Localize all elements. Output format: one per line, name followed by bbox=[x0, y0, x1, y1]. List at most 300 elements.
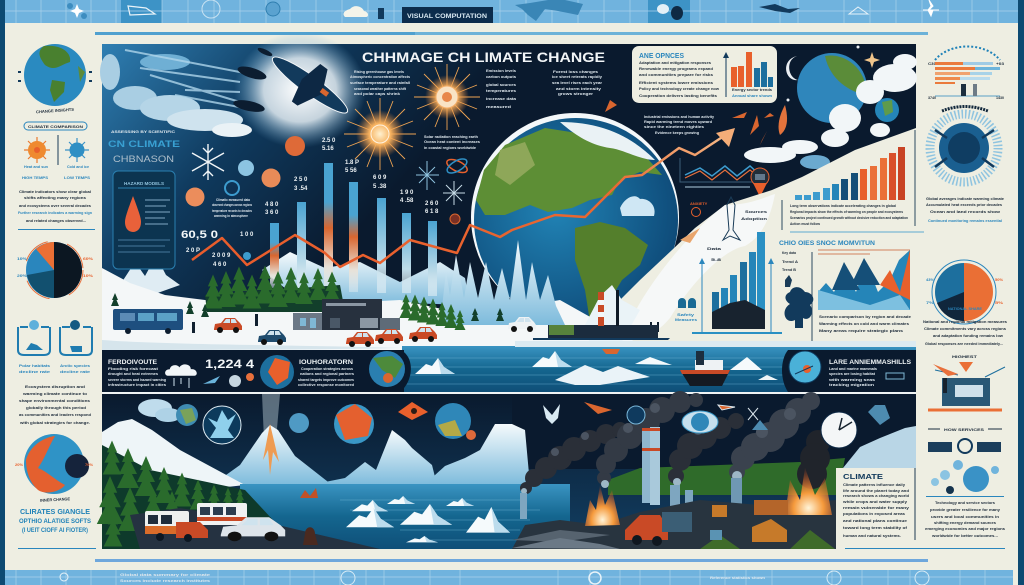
right cloud bank bbox=[744, 54, 917, 169]
bar labels: 3 6 0 bbox=[265, 210, 279, 216]
snow hill bbox=[843, 426, 916, 468]
mid chart notes: 5.8 bbox=[711, 257, 722, 262]
left column: text: and related changes observed... bbox=[26, 218, 86, 223]
water band bbox=[390, 341, 916, 392]
dark band left: drought and heat extremes bbox=[108, 372, 158, 376]
text block: beside title bbox=[350, 70, 410, 96]
text block: above arrow: since the nineteen eighties bbox=[644, 125, 704, 129]
dark band right: species are losing habitat bbox=[829, 372, 876, 376]
text block: beside title: Atmospheric concentration affects bbox=[350, 75, 410, 79]
snowflake bbox=[192, 144, 224, 180]
heading: in climate: ASSESSING BY SCIENTIFIC bbox=[111, 130, 175, 134]
snow mountains bbox=[118, 252, 470, 305]
icebergs in band bbox=[415, 351, 778, 385]
left column: rule bbox=[18, 548, 96, 549]
heading: climates change: CLIRATES GIANGLE bbox=[20, 509, 90, 516]
small globe set bbox=[289, 402, 476, 444]
panel: climate text: CLIMATE bbox=[843, 474, 883, 481]
people bbox=[192, 314, 659, 333]
dark band right: Land and marine mammals bbox=[829, 367, 877, 371]
right gauge: 1430 bbox=[996, 95, 1005, 100]
clock bbox=[821, 412, 857, 448]
panel: climate text: toward long term stability of bbox=[843, 525, 908, 530]
text block: title right: increase data bbox=[486, 97, 517, 101]
right text: Continued monitoring remains essential bbox=[928, 218, 1002, 223]
caption: NATIONAL SHARE bbox=[948, 306, 982, 311]
dark band left: nations and regional partners bbox=[300, 372, 354, 376]
bus bbox=[113, 309, 183, 334]
text block: below bars: Scenarios project continued growth without decisive reduction and adaptation bbox=[790, 215, 908, 220]
text block: near planets: warming in atmosphere bbox=[213, 214, 248, 218]
text block: beside title: Rising greenhouse gas levels bbox=[354, 70, 404, 74]
band caption bbox=[120, 573, 210, 583]
pie chart right: 50% bbox=[995, 277, 1003, 282]
text block: beside title: and polar caps shrink bbox=[354, 92, 401, 96]
main dark ground water bbox=[240, 484, 570, 549]
left column: paragraph: globally through this period bbox=[26, 405, 87, 410]
panel: climate text: populations in exposed areas bbox=[843, 511, 906, 516]
stacks bbox=[520, 427, 742, 519]
text block: top centre: sea level rises each year bbox=[552, 81, 603, 85]
small icons: atom and snow bbox=[416, 156, 469, 224]
smoke plumes bbox=[520, 391, 830, 494]
left column: captions: HIGH TEMPS bbox=[22, 175, 48, 180]
text block: below bars: Long term observations indicate accelerating changes in global bbox=[790, 203, 896, 208]
right lower text bbox=[925, 500, 1006, 538]
panel: climate text: human and natural systems. bbox=[843, 533, 901, 538]
bar labels: 5 56 bbox=[345, 168, 357, 174]
caution label bbox=[690, 201, 708, 216]
icon: dial bbox=[60, 573, 68, 581]
factory bbox=[533, 290, 670, 340]
text block: top centre: grows stronger bbox=[558, 92, 594, 96]
tree icon bbox=[785, 287, 813, 328]
icon: cog bbox=[266, 2, 280, 16]
right text: Ocean and land records show bbox=[930, 209, 1001, 214]
heading: climates change: OPTHIO ALATIGE SOFTS bbox=[19, 518, 91, 525]
dark band left: infrastructure impact in cities bbox=[108, 383, 166, 387]
left column: paragraph: warming climate continue to bbox=[22, 391, 88, 396]
right lower text: provide greater resilience for many bbox=[930, 507, 1001, 512]
boat red bbox=[300, 488, 318, 498]
rule bbox=[926, 496, 1004, 497]
icon: blue circle bbox=[789, 351, 821, 383]
left column: paragraph: with global strategies for change. bbox=[19, 420, 90, 425]
divider and heading: CHIO OIES SNOC MOMVITUN bbox=[779, 240, 875, 247]
text block: above arrow: Evidence keeps growing bbox=[655, 131, 700, 135]
map pin bbox=[751, 168, 769, 197]
icon: habitat frames bbox=[18, 320, 92, 355]
list notes and column: Key data bbox=[782, 250, 797, 255]
left column: captions bbox=[19, 363, 91, 374]
small dome icons bbox=[675, 298, 698, 322]
forest bbox=[111, 266, 504, 330]
globe band bbox=[260, 355, 294, 389]
mid bar chart bbox=[692, 232, 782, 333]
lower scene bbox=[97, 391, 916, 549]
left column: captions: Heat and sun bbox=[24, 164, 49, 169]
thermometer card bbox=[113, 171, 175, 269]
left column: text: Further research indicates a warming sign bbox=[18, 210, 92, 215]
bar labels: 3 .54 bbox=[294, 186, 308, 192]
left column: paragraph: shape environmental conditions bbox=[19, 398, 91, 403]
info box: responses: Annual share shown bbox=[732, 93, 773, 98]
panel: climate text: Climate patterns influence daily bbox=[843, 482, 906, 487]
right gauge bbox=[928, 46, 1005, 100]
text block: under suns: Ocean heat content increases bbox=[424, 140, 480, 144]
pie chart left: 10% bbox=[17, 256, 28, 261]
panel: climate text: and national plans continue bbox=[843, 518, 908, 523]
pie chart right: 5% bbox=[995, 300, 1004, 305]
text block: near planets: Climatic measured data bbox=[216, 198, 251, 202]
small buildings bbox=[928, 439, 1001, 453]
banner: VISUAL COMPUTATION bbox=[407, 13, 487, 20]
ice spikes bbox=[440, 240, 640, 345]
text block: title right: temperatures bbox=[486, 89, 516, 93]
dark band left bbox=[102, 350, 411, 392]
left column: caption: CHANGE INSIGHTS bbox=[36, 107, 74, 114]
small planes and rockets bbox=[605, 100, 787, 145]
left column: text: shifts affecting many regions bbox=[24, 195, 87, 200]
bar labels bbox=[186, 138, 439, 268]
mini wave chart bbox=[680, 158, 765, 187]
text block: top centre: ice sheet retreats rapidly bbox=[552, 75, 603, 79]
heading: in climate bbox=[108, 130, 180, 164]
pie chart left bbox=[17, 241, 94, 299]
planets bbox=[186, 136, 305, 260]
text block: title right: carbon outputs bbox=[486, 75, 516, 79]
white van bbox=[508, 317, 536, 332]
bar labels: 1.8 P bbox=[345, 160, 359, 166]
icon: cold bbox=[65, 138, 89, 162]
right lower text: worldwide for better outcomes... bbox=[931, 533, 998, 538]
small icons band bbox=[203, 373, 254, 387]
heading with rule bbox=[928, 427, 1002, 432]
right lower text: shifting energy demand sources bbox=[934, 520, 997, 525]
right lower text: users and local communities in bbox=[931, 514, 1000, 519]
left column: paragraph bbox=[19, 384, 92, 425]
mid chart notes bbox=[680, 197, 768, 262]
left column: orange globe bbox=[15, 434, 93, 494]
band caption: Sources include research institutes bbox=[120, 579, 210, 583]
earth: main globe bbox=[471, 113, 679, 322]
info box: responses: Adaptation and mitigation responses bbox=[639, 60, 712, 65]
info box: responses: Energy sector trends bbox=[732, 87, 773, 92]
icon: globes bbox=[657, 4, 683, 20]
left column: text: Climate indicators show clear global bbox=[19, 189, 91, 194]
big number: 60,5 0 bbox=[181, 229, 218, 241]
icon: star bbox=[923, 0, 939, 16]
cars bbox=[214, 318, 437, 347]
text block: near planets: temperature records to decades bbox=[212, 209, 252, 213]
pie chart right: 43% bbox=[926, 277, 934, 282]
text block: title right: global sources bbox=[486, 83, 516, 87]
cream slope panel bbox=[600, 128, 916, 345]
right text: Accumulated heat exceeds prior decades bbox=[926, 202, 1003, 207]
bus rear bbox=[197, 503, 247, 525]
upper right globe bbox=[797, 53, 899, 123]
top tick strip bbox=[95, 32, 928, 35]
icon: globe bbox=[827, 571, 841, 585]
speed streaks bbox=[125, 50, 255, 110]
info box: responses: Policy and technology create change now bbox=[639, 86, 720, 91]
dark band left: IOUHORATORN bbox=[299, 360, 353, 366]
bottom right rule bbox=[845, 548, 1005, 549]
left column: captions: Polar habitats bbox=[19, 363, 51, 368]
icon: mesh bbox=[915, 571, 929, 585]
heading: in climate: CHBNASON bbox=[113, 154, 174, 164]
left snow mountain bbox=[102, 419, 245, 490]
right paragraph: Climate commitments vary across regions bbox=[924, 326, 1007, 331]
heading with rule: HOW SERVICES bbox=[944, 427, 984, 432]
bar labels: 2.5 0 bbox=[322, 138, 336, 144]
text block: under suns: Solar radiation reaching earth bbox=[424, 135, 479, 139]
bottom tick strip bbox=[95, 559, 928, 562]
clouds and small globes bbox=[138, 399, 198, 426]
list notes and column: Trend A bbox=[782, 259, 798, 264]
right edge stripe bbox=[1018, 0, 1024, 585]
text block: below bars bbox=[782, 130, 915, 230]
right text: Global averages indicate warming climate bbox=[926, 196, 1005, 201]
text block: top centre: and storm intensity bbox=[556, 87, 602, 91]
plane bbox=[259, 39, 361, 131]
dark band left: collective response monitored bbox=[298, 383, 355, 387]
banner bbox=[402, 7, 493, 23]
snow ground bbox=[102, 268, 640, 350]
right lower text: emerging economies and major regions bbox=[925, 526, 1006, 531]
bar labels: 2 6 0 bbox=[425, 201, 439, 207]
right paragraph: and adaptation funding remains low bbox=[933, 333, 1004, 338]
right gauge: 3740 bbox=[928, 95, 937, 100]
text block: below bars: Action must follow bbox=[790, 221, 821, 226]
globe edge bbox=[369, 351, 405, 387]
icon: document bbox=[128, 6, 155, 15]
right paragraph: Global responses are needed immediately... bbox=[925, 341, 1003, 346]
thermometer card: HAZARD MODELS bbox=[124, 181, 164, 186]
suns bbox=[344, 64, 480, 170]
ice cliffs bbox=[310, 424, 530, 485]
text block: top centre: Forest loss changes bbox=[553, 70, 598, 74]
person bbox=[303, 527, 318, 545]
left column: pill: CLIMATE COMPARISON bbox=[28, 124, 83, 129]
rock ground bbox=[512, 500, 838, 549]
right hub icon bbox=[930, 114, 998, 182]
icon: swirl ring bbox=[202, 0, 220, 18]
mid chart notes: Adoption bbox=[741, 216, 768, 221]
orange trend line bbox=[192, 132, 730, 267]
icon: satellite bbox=[759, 4, 800, 13]
icon: battery bbox=[378, 8, 384, 19]
heading: in climate: CN CLIMATE bbox=[108, 139, 180, 150]
list notes and column bbox=[782, 250, 812, 342]
right text bbox=[926, 196, 1005, 223]
text block: above arrow: Rapid warming trend moves upward bbox=[644, 120, 713, 124]
ship bbox=[680, 351, 730, 386]
text block: title right bbox=[486, 69, 517, 109]
icon: world map bbox=[515, 0, 583, 21]
bar labels: 5.16 bbox=[322, 146, 334, 152]
dark band right: LARE ANNIEMMASHILLS bbox=[829, 360, 911, 366]
dark band right: tracking migration bbox=[829, 383, 875, 387]
mid chart notes: Data bbox=[707, 246, 722, 251]
left column: caption: INNER CHANGE bbox=[40, 496, 71, 503]
icon: mesh ball bbox=[341, 571, 355, 585]
blue map blobs bbox=[931, 460, 999, 494]
arc pattern bbox=[942, 106, 988, 111]
left edge stripe bbox=[0, 0, 5, 585]
bar labels: 2 0 P bbox=[186, 248, 200, 254]
panel: climate text bbox=[836, 468, 916, 549]
fires bbox=[585, 468, 832, 526]
text block: above arrow bbox=[644, 115, 715, 135]
bar labels: 4 .58 bbox=[400, 198, 414, 204]
bar labels: 1 0 0 bbox=[240, 232, 254, 238]
text block: below bars: Regional impacts show the effects of warming on people and ecosystems bbox=[790, 209, 904, 214]
left column: orange globe: 70% bbox=[85, 462, 93, 467]
large figure: 1,224 4 bbox=[205, 357, 254, 371]
ring with ice bbox=[203, 406, 241, 444]
text block: under suns bbox=[424, 135, 480, 150]
icon: sun bbox=[24, 137, 50, 163]
info box: responses: Renewable energy programs expand bbox=[639, 66, 714, 71]
bar labels: 5 .38 bbox=[373, 184, 387, 190]
left column: globe bbox=[18, 44, 92, 106]
industry icon: HIGHEST bbox=[952, 354, 978, 359]
mid chart notes: Sources bbox=[745, 209, 768, 214]
left column: paragraph: as communities and leaders respond bbox=[19, 412, 92, 417]
small dome icons: Measures bbox=[675, 317, 698, 322]
small boat bbox=[602, 349, 620, 354]
road bbox=[130, 508, 380, 549]
icon: rain cloud bbox=[165, 364, 197, 388]
top header band bbox=[5, 0, 1018, 23]
blue value bars bbox=[270, 163, 437, 296]
text block: under peaks: Scenario comparison by region and decade bbox=[819, 314, 912, 319]
dark band left: severe storms and hazard warning bbox=[108, 378, 167, 382]
left column: pill bbox=[24, 122, 87, 130]
divider bbox=[102, 392, 916, 394]
right paragraph: National and regional mitigation measures bbox=[923, 319, 1008, 324]
right gauge: C30 bbox=[928, 61, 937, 66]
dark band left: shared targets improve outcomes bbox=[298, 378, 354, 382]
icon: cloud bbox=[344, 6, 368, 17]
bar labels: 4 6 0 bbox=[213, 262, 227, 268]
bottom band bbox=[5, 570, 1013, 585]
moon and stars bbox=[786, 46, 880, 102]
divider vertical bbox=[57, 135, 59, 165]
text block: beside title: seasonal weather patterns shift bbox=[354, 87, 407, 91]
text block: above arrow: Industrial emissions and human activity bbox=[644, 115, 715, 119]
pie chart right bbox=[926, 260, 1004, 324]
cabins bbox=[710, 500, 788, 542]
left column: captions: Cold and ice bbox=[67, 164, 90, 169]
right gauge: +03 bbox=[996, 61, 1005, 66]
left column: text: and ecosystems over several decades bbox=[19, 203, 92, 208]
small dome icons: Safety bbox=[677, 312, 695, 317]
caution label: ANXIETY bbox=[690, 201, 708, 206]
text block: under peaks: Warming effects on cold and warm climates bbox=[819, 321, 910, 326]
left column: orange globe: 20% bbox=[15, 462, 23, 467]
info box: responses bbox=[632, 46, 777, 103]
panel: climate text: life around the planet today and bbox=[843, 488, 910, 493]
panel: climate text: research shows a changing world bbox=[843, 493, 910, 498]
bar labels: 6 1 8 bbox=[425, 209, 439, 215]
info box: responses: Efficient systems lower emissions bbox=[639, 80, 714, 85]
clouds behind plane bbox=[100, 54, 252, 137]
dark band right: with warming seas bbox=[828, 378, 875, 382]
red truck bbox=[625, 512, 692, 546]
info box: responses: ANE OPNCES bbox=[639, 53, 684, 60]
pie chart left: 60% bbox=[83, 256, 94, 261]
tree strip bbox=[608, 458, 845, 495]
left column: rule bbox=[18, 229, 95, 230]
left column: captions bbox=[22, 164, 90, 180]
bar labels: 2 5 0 bbox=[294, 177, 308, 183]
left column: captions: Arctic species bbox=[60, 363, 91, 368]
title: CHHMAGE CH LIMATE CHANGE bbox=[362, 49, 605, 65]
volcano ice mountain bbox=[212, 424, 332, 485]
band note: Reference statistics shown bbox=[710, 576, 766, 580]
text block: near planets: observed changes across regions bbox=[212, 203, 252, 207]
left column: captions: LOW TEMPS bbox=[64, 175, 90, 180]
right lower text: Technology and service sectors bbox=[935, 500, 996, 505]
bar labels: 1 9 0 bbox=[400, 190, 414, 196]
dark band left: Flooding risk forecast bbox=[108, 367, 159, 371]
icebergs bbox=[346, 496, 510, 542]
right bar chart bbox=[795, 147, 905, 200]
arrow head bbox=[716, 128, 735, 147]
pie chart left: 20% bbox=[17, 273, 28, 278]
left column: text bbox=[18, 189, 92, 223]
text block: beside title: surface temperature and rainfall bbox=[350, 81, 410, 85]
heading: climates change bbox=[19, 509, 91, 534]
building bbox=[293, 299, 400, 330]
white car bbox=[221, 517, 285, 541]
panel: climate text: while crops and water supply bbox=[842, 499, 908, 504]
lower icons on dark bbox=[543, 402, 890, 433]
text block: title right: Emission levels bbox=[486, 69, 516, 73]
forest slope bbox=[97, 440, 300, 549]
text block: near planets bbox=[212, 198, 252, 218]
industry icon bbox=[928, 354, 1005, 410]
list notes and column: Trend B bbox=[782, 267, 796, 272]
band caption: Global data summary for climate bbox=[120, 573, 210, 577]
main upper dark panel bbox=[100, 32, 924, 350]
jets small bbox=[232, 46, 273, 114]
text block: under peaks bbox=[819, 314, 912, 333]
text block: top centre bbox=[552, 70, 603, 96]
orange van bbox=[145, 511, 208, 542]
heading: climates change: (I UEIT CIOFF AI FIOTER) bbox=[22, 527, 88, 534]
dark band right bbox=[782, 350, 916, 392]
area peak chart bbox=[818, 250, 910, 310]
pie chart left: 10% bbox=[83, 273, 94, 278]
icon: clock bbox=[589, 572, 601, 584]
dark band left: FERDOIVOUTE bbox=[108, 360, 157, 366]
left column: captions: decline rate bbox=[60, 369, 91, 374]
info box: responses: Cooperation delivers lasting benefits bbox=[639, 93, 718, 98]
icon: sparkle bbox=[67, 3, 87, 19]
icon: mountain line bbox=[849, 7, 868, 14]
right paragraph bbox=[923, 319, 1008, 346]
pie chart right: 7% bbox=[926, 300, 935, 305]
bar labels: 2 0 0 9 bbox=[212, 253, 231, 259]
text block: under suns: in coastal regions worldwide bbox=[424, 146, 476, 150]
bar labels: 6 0 9 bbox=[373, 175, 387, 181]
bar labels: 4 8 0 bbox=[265, 202, 279, 208]
dark band left: Cooperation strategies across bbox=[301, 367, 353, 371]
left column: paragraph: Ecosystem disruption and bbox=[25, 384, 86, 389]
